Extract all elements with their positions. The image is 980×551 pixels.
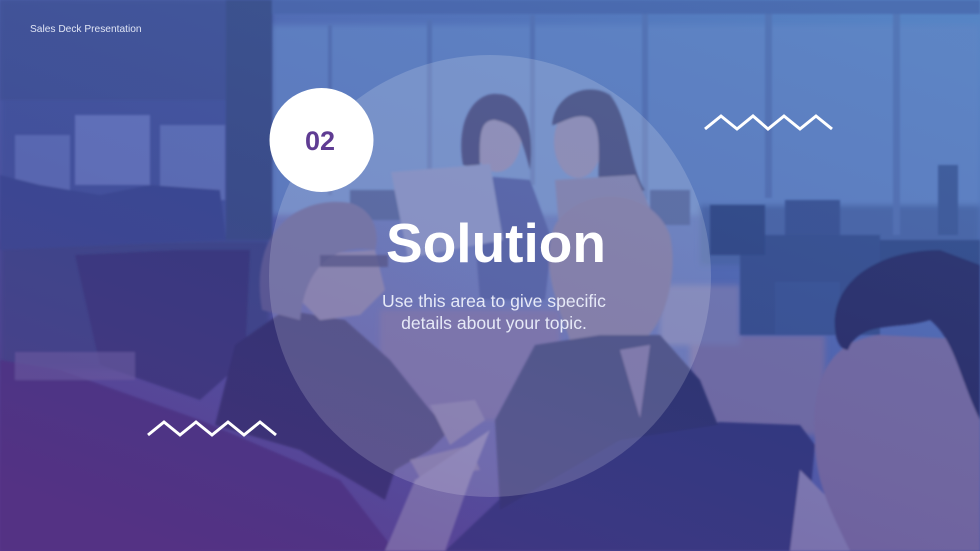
deck label: Sales Deck Presentation [30,24,142,35]
description: Use this area to give specific [382,291,606,311]
skyline silhouette [0,175,226,250]
title: Solution [386,212,606,274]
translucent circle [269,55,711,497]
woman in front [549,196,673,340]
laptop [391,164,503,258]
table [385,430,490,551]
seated woman left [215,310,450,500]
description [382,291,606,333]
number badge [270,88,374,192]
second woman standing [554,106,602,178]
dark chairs [75,250,250,400]
number badge: 02 [305,126,335,156]
woman standing [473,104,521,172]
monitors on desks [740,235,880,335]
zigzag top right [705,116,832,129]
description: details about your topic. [401,313,587,333]
man right [814,335,980,551]
zigzag bottom left [148,422,276,435]
